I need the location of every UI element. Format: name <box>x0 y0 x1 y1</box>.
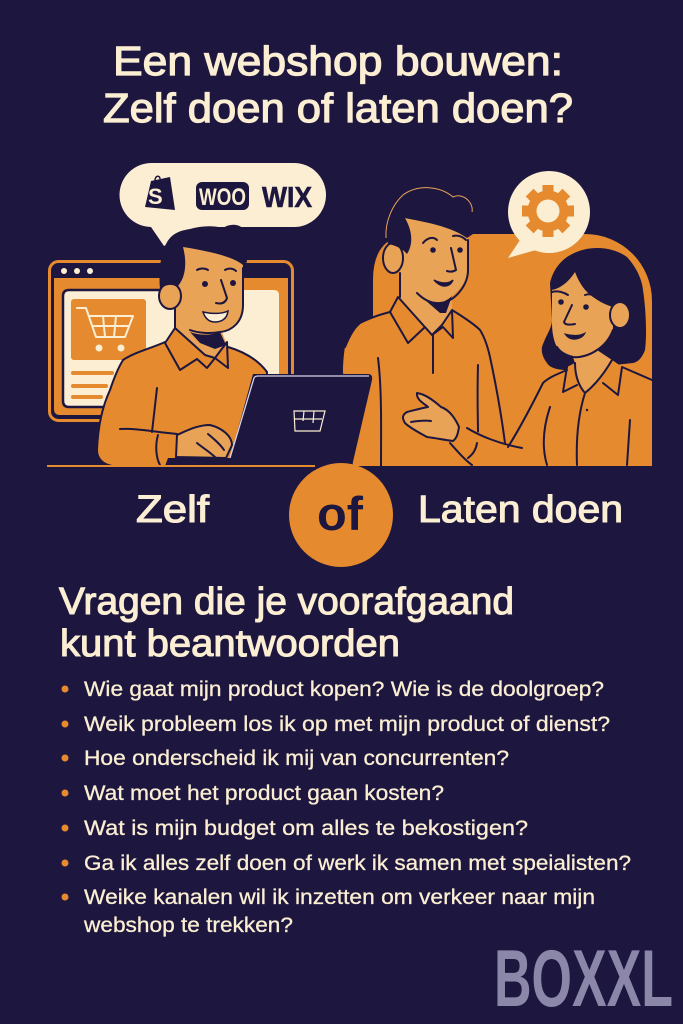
illustration: table line <box>47 465 315 467</box>
collar <box>165 328 228 370</box>
question list: Wie gaat mijn product kopen? Wie is de doolgroep? <box>84 677 604 701</box>
question list: webshop te trekken? <box>83 913 293 937</box>
icon: gear speech bubble <box>508 171 590 258</box>
speech bubble with platform logos <box>120 163 326 246</box>
face and neck <box>552 272 622 395</box>
logo: Woo: WOO <box>199 184 246 211</box>
question list: Ga ik alles zelf doen of werk ik samen met speialisten? <box>84 851 631 875</box>
question list: Weik probleem los ik op met mijn product of dienst? <box>84 712 610 736</box>
illustration: consultant man <box>343 188 505 466</box>
title: Een webshop bouwen: <box>113 38 563 84</box>
title: Zelf doen of laten doen? <box>103 85 573 131</box>
title <box>103 38 573 131</box>
blouse <box>458 367 652 466</box>
question list: Weike kanalen wil ik inzetten om verkeer naar mijn <box>84 885 595 909</box>
icon: gear <box>522 185 574 237</box>
icon: Shopify bag: S <box>148 184 163 209</box>
head <box>400 218 468 335</box>
"of" badge: of <box>317 487 363 540</box>
gesturing hand <box>403 393 459 441</box>
question list: Wat moet het product gaan kosten? <box>84 781 444 805</box>
logo: Wix: WIX <box>262 182 313 214</box>
illustration: browser window with shopping cart <box>50 262 292 420</box>
illustration: woman with gesture hand <box>403 248 652 466</box>
section heading: kunt beantwoorden <box>60 623 400 665</box>
question list <box>62 677 631 937</box>
neck and face <box>176 247 243 368</box>
section heading <box>59 581 514 665</box>
icon: shopping cart <box>77 308 133 352</box>
label: Zelf: Zelf <box>136 489 209 531</box>
illustration: laptop <box>165 374 372 466</box>
label: Laten doen: Laten doen <box>418 489 623 531</box>
"of" badge <box>289 463 393 567</box>
collar <box>390 297 453 343</box>
hand <box>176 425 232 458</box>
icon: Shopify bag <box>145 176 175 210</box>
illustration: orange background panel <box>373 234 652 466</box>
section heading: Vragen die je voorafgaand <box>59 581 514 623</box>
question list: Wat is mijn budget om alles te bekostigen? <box>84 816 528 840</box>
illustration: man with laptop <box>97 225 267 466</box>
question list: Hoe onderscheid ik mij van concurrenten? <box>84 746 509 770</box>
